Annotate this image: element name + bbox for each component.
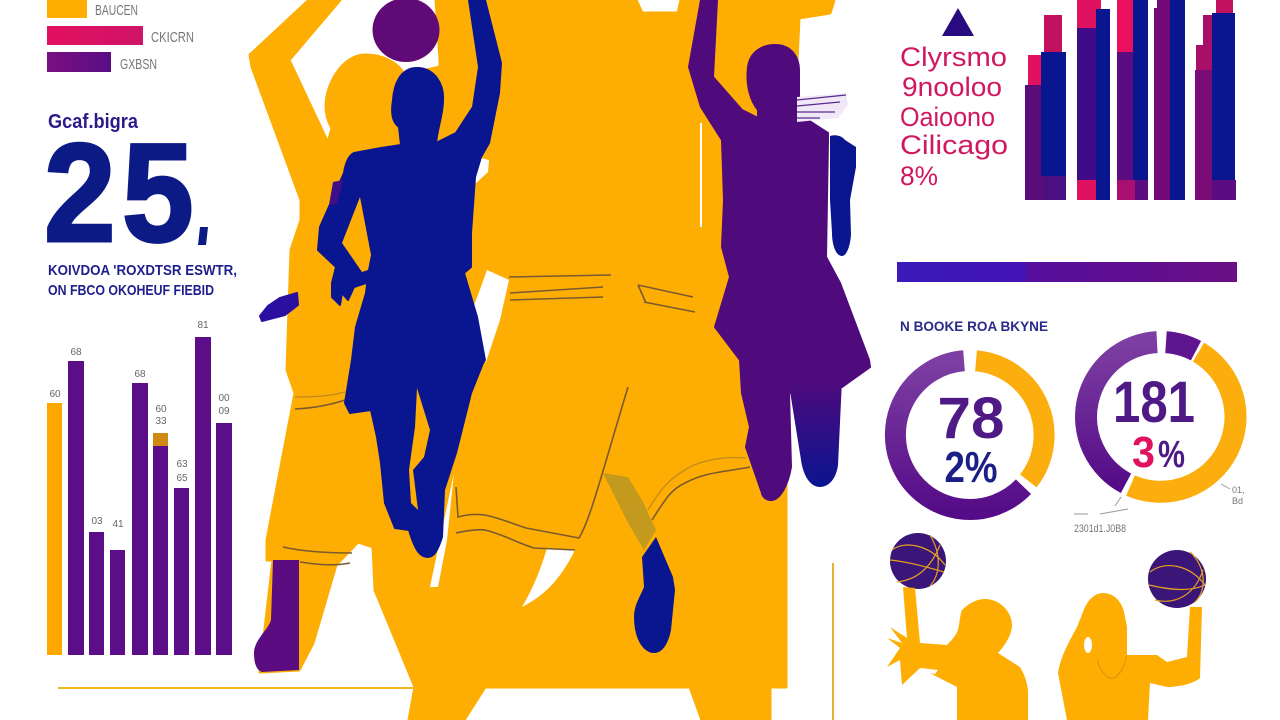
city list: Oaioono — [900, 102, 995, 132]
purple accent — [329, 180, 343, 205]
donut chart: 181 3%: 181 — [1113, 370, 1195, 435]
navy shoe — [634, 537, 675, 653]
bar chart: left: 68 — [134, 369, 146, 380]
purple player second leg — [789, 380, 842, 487]
mini player: left — [887, 533, 1028, 720]
yellow silhouette: back players and central player — [250, 0, 834, 720]
legend: horizontal bars: BAUCEN — [95, 2, 138, 19]
ball: left — [890, 533, 946, 589]
yellow gap: navy arm — [342, 197, 371, 272]
ball: right — [1148, 550, 1206, 608]
donut annotations: Bd — [1232, 496, 1243, 506]
legend: horizontal bars: CKICRN — [151, 29, 194, 46]
purple shoe — [254, 560, 299, 672]
bar chart: left: 65 — [176, 473, 188, 484]
donut chart: 181 3% — [1086, 342, 1236, 492]
vertical rule — [832, 563, 834, 720]
hair strokes — [797, 93, 848, 122]
bar chart: left: 60 — [155, 404, 167, 415]
mini player: right — [1058, 550, 1206, 720]
donut annotations: 01, — [1232, 485, 1245, 495]
legend: horizontal bars — [47, 0, 194, 73]
ball: purple — [372, 0, 440, 62]
players illustration — [250, 0, 870, 720]
stat block: 25: Gcaf.bigra — [48, 111, 139, 133]
city list: Cilicago — [900, 130, 1008, 160]
donut chart: 78 2%: 78 — [938, 386, 1004, 451]
stacked bars: top right — [1025, 0, 1236, 200]
donut annotations: 2301d1.J0B8 — [1074, 523, 1126, 535]
gradient bar — [897, 262, 1237, 282]
bar chart: left: 09 — [218, 406, 230, 417]
olive band — [603, 473, 656, 550]
city list: Clyrsmo — [900, 42, 1007, 72]
bar chart: left: 33 — [155, 416, 167, 427]
donut chart: 78 2%: 2% — [944, 443, 998, 492]
stat block: 25: ON FBCO OKOHEUF FIEBID — [48, 282, 214, 299]
donut chart: 181 3%: % — [1158, 434, 1185, 476]
triangle icon — [942, 8, 974, 36]
bar chart: left: 00 — [218, 393, 230, 404]
city list — [900, 42, 1008, 191]
donut chart: 181 3%: 3 — [1132, 428, 1155, 477]
donut annotations — [1074, 484, 1245, 535]
bar chart: left: 41 — [112, 519, 124, 530]
purple player — [689, 0, 870, 500]
bar chart: left: 63 — [176, 459, 188, 470]
bar chart: left: 03 — [91, 516, 103, 527]
stat block: 25 — [44, 111, 237, 299]
shorts detail lines — [283, 275, 750, 565]
bar chart: left: 81 — [197, 320, 209, 331]
stat block: 25: KOIVDOA 'ROXDTSR ESWTR, — [48, 262, 237, 279]
yellow gap: navy legs — [409, 388, 430, 510]
stat block: 25: 5 — [122, 114, 194, 271]
city list: 9nooloo — [902, 72, 1002, 102]
navy leaf shape — [260, 293, 298, 321]
donut heading: N BOOKE ROA BKYNE — [900, 318, 1048, 334]
city list: 8% — [900, 161, 938, 191]
bar chart: left: 68 — [70, 347, 82, 358]
white gaps — [430, 123, 702, 607]
bar chart: left: 60 — [49, 389, 61, 400]
navy forearm — [830, 135, 856, 256]
legend: horizontal bars: GXBSN — [120, 56, 157, 73]
donut chart: 78 2% — [895, 361, 1044, 509]
bar chart: left — [47, 320, 232, 655]
baseline rule — [58, 687, 418, 689]
navy player — [318, 0, 501, 557]
stat block: 25: 2 — [44, 114, 116, 271]
